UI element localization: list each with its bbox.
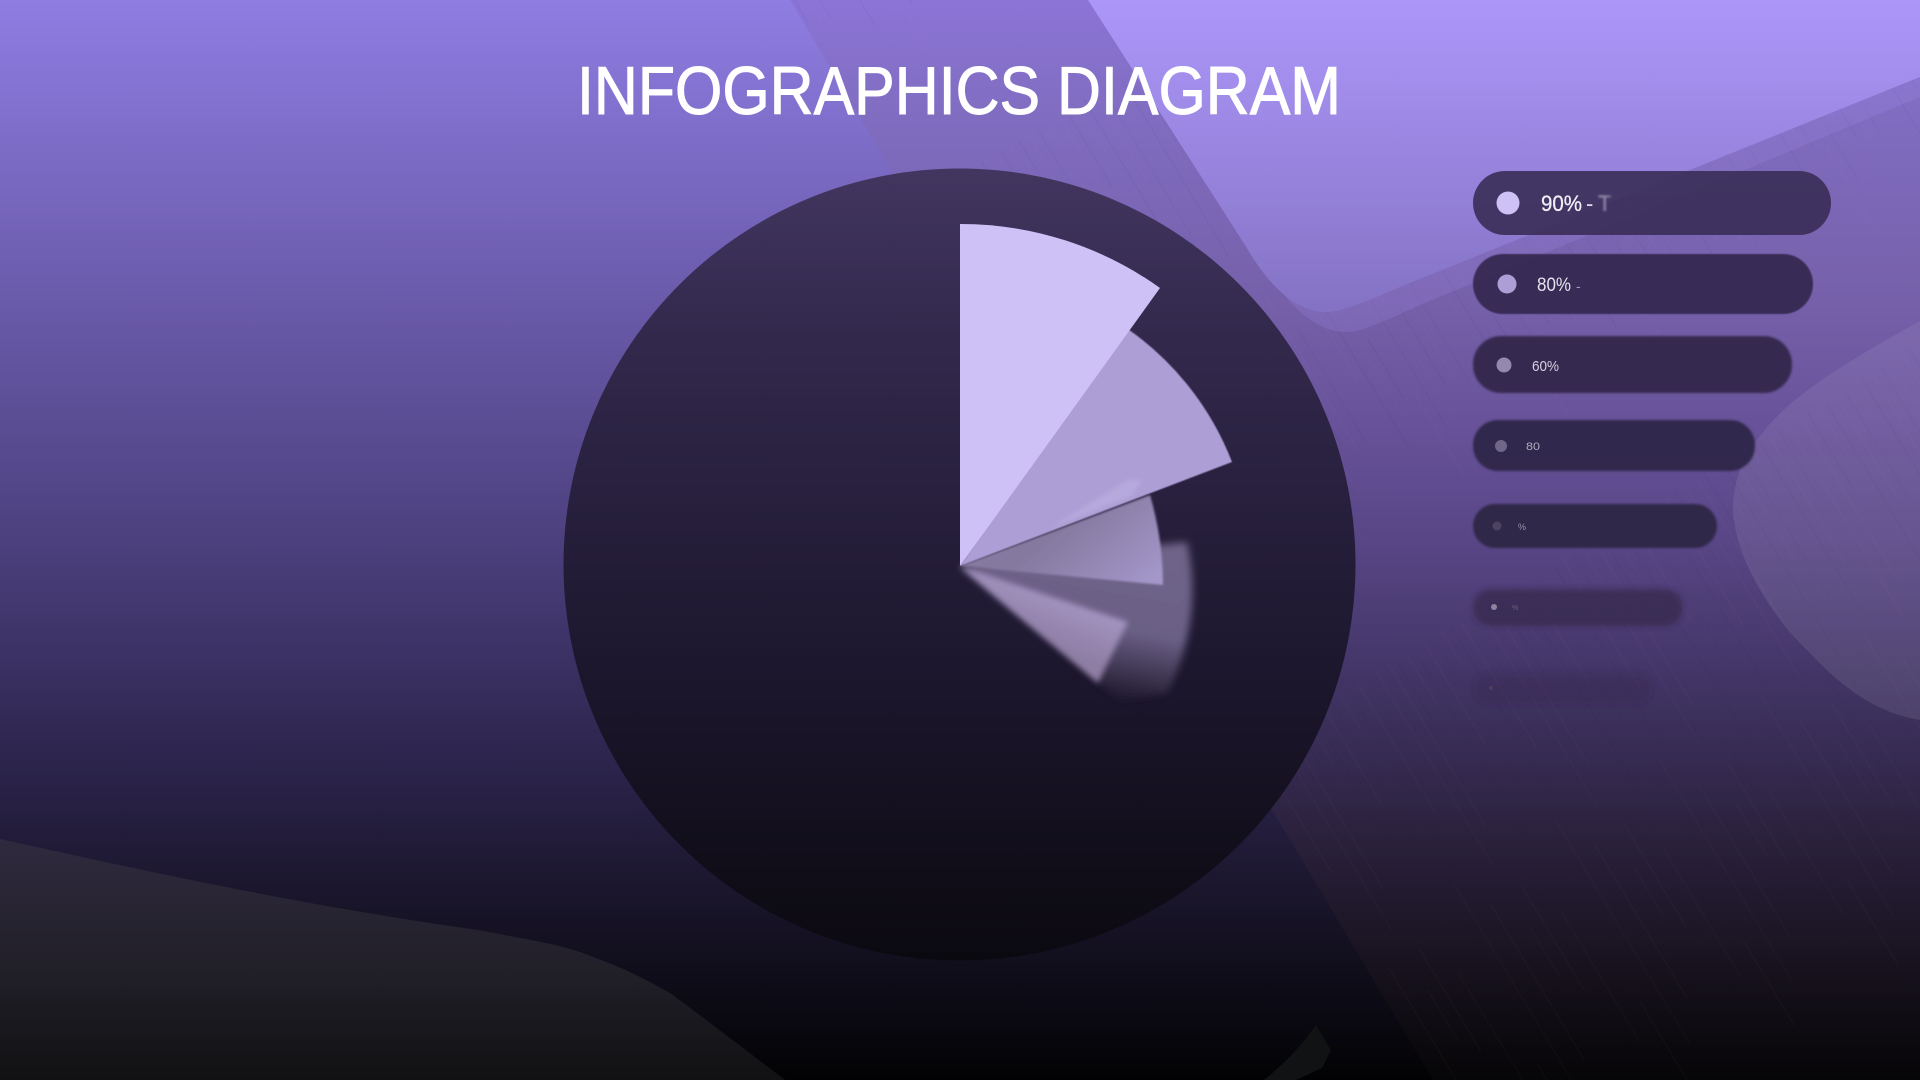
wedge 1 xyxy=(960,224,1160,566)
legend row 1: 90% xyxy=(1541,191,1582,216)
legend row 3: 60% xyxy=(1532,358,1559,375)
wedge 3 xyxy=(960,495,1163,585)
legend row 7 xyxy=(1473,673,1653,704)
wedge 4: faded xyxy=(960,542,1192,700)
legend row 2: 80% xyxy=(1537,275,1571,296)
legend row 1 xyxy=(1473,171,1831,235)
legend row 6 xyxy=(1473,589,1683,626)
background: small sliver bottom xyxy=(1264,1025,1331,1080)
background: right blob xyxy=(1733,321,1920,720)
legend row 2: - xyxy=(1576,278,1581,294)
legend row 5: % xyxy=(1518,522,1526,532)
legend row 4 xyxy=(1473,420,1755,471)
dark disc xyxy=(564,168,1356,960)
legend row 6: % xyxy=(1512,605,1518,612)
legend xyxy=(1473,171,1831,704)
wedge 2 highlight xyxy=(1050,480,1142,528)
legend row 1: - xyxy=(1586,191,1593,216)
legend row 5 xyxy=(1473,504,1717,548)
background: light top-right panel xyxy=(1088,0,1920,312)
legend row 1: T xyxy=(1598,191,1611,216)
title: INFOGRAPHICS DIAGRAM xyxy=(577,53,1341,129)
legend row 4: 80 xyxy=(1526,441,1540,453)
legend row 3 xyxy=(1473,336,1792,393)
background: bottom-left gray shape xyxy=(0,839,785,1080)
wedge 2 xyxy=(960,327,1232,566)
wedge 5 xyxy=(960,566,1128,683)
background: soft band under light panel xyxy=(1100,0,1920,332)
pie chart xyxy=(564,168,1356,960)
legend row 2 xyxy=(1473,254,1813,314)
background: diagonal streaked band xyxy=(790,0,1920,1080)
